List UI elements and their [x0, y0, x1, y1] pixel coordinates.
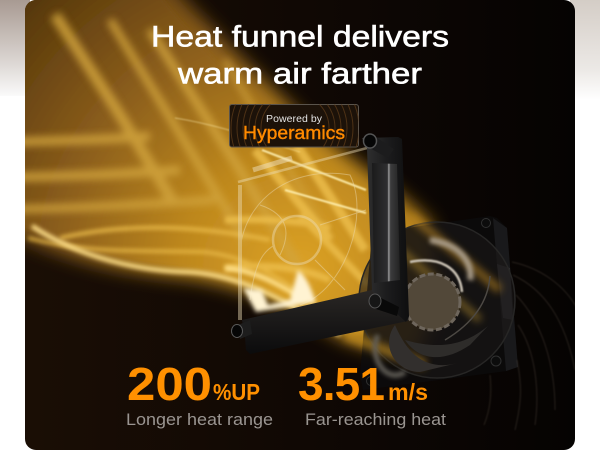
badge: Powered by Hyperamics: Powered by [266, 113, 323, 125]
fan hub [404, 274, 460, 330]
title [153, 24, 448, 84]
stat: 200% UP: %UP [213, 379, 260, 405]
tube bottom right [375, 298, 399, 316]
radiator bottom bar [242, 290, 409, 354]
badge: Powered by Hyperamics [229, 104, 359, 148]
fan frame [362, 224, 446, 368]
stat: 200% UP [128, 368, 272, 428]
radiator frame [232, 134, 409, 354]
fan screws [366, 218, 501, 386]
stat: 3.51 m/s: 3.51 [298, 358, 385, 410]
stat: 200% UP: 200 [127, 358, 212, 410]
radiator inner reservoir [372, 163, 400, 283]
tube bottom left [240, 323, 252, 339]
gold streaks over fan [345, 215, 500, 365]
title: warm air farther [177, 58, 422, 90]
stat: 3.51 m/s: m/s [388, 379, 428, 405]
rear fan [345, 215, 578, 430]
stat: 200% UP: Longer heat range [126, 410, 273, 429]
stat: 3.51 m/s: Far-reaching heat [305, 410, 446, 429]
background top-right haze [570, 0, 600, 100]
radiator right bar [362, 137, 409, 322]
radiator white glow [243, 270, 316, 312]
heat airflow stream [0, 0, 440, 360]
exhaust arcs [484, 262, 578, 430]
fan ring [359, 222, 515, 378]
background top-left haze [0, 0, 30, 96]
fan blades [375, 240, 490, 375]
badge: Powered by Hyperamics: Hyperamics [243, 122, 345, 143]
stat: 3.51 m/s [299, 368, 446, 428]
tube top [372, 138, 378, 152]
radiator translucent left frame and rear fan ghost [238, 148, 367, 320]
title: Heat funnel delivers [151, 20, 449, 54]
